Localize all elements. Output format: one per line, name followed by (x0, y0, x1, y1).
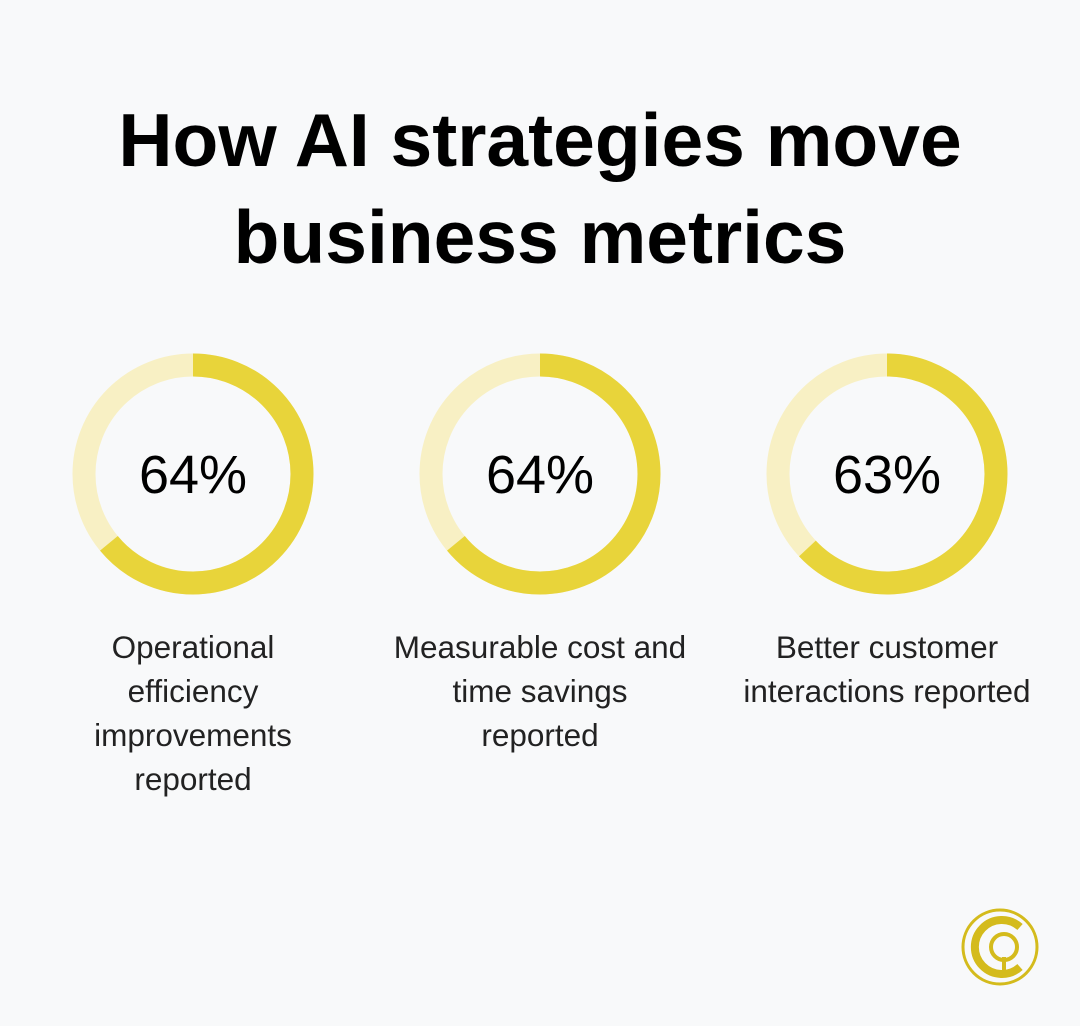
label 2: time savings (452, 673, 628, 709)
donut: 64% cost (420, 354, 660, 594)
label 1: reported (134, 761, 252, 797)
label 1: Operational (112, 629, 274, 665)
label 3: Better customer (776, 629, 998, 665)
donut: 64% operational: 64% (139, 445, 247, 505)
label 2 (394, 629, 686, 753)
donut: 64% operational (72, 354, 314, 594)
title (118, 98, 962, 279)
donut: 63% customer: 63% (833, 445, 941, 505)
label 2: reported (481, 717, 599, 753)
donut: 63% customer (766, 354, 1008, 594)
donut: 64% cost: 64% (486, 445, 594, 505)
label 1: efficiency (128, 673, 258, 709)
label 2: Measurable cost and (394, 629, 686, 665)
title: business metrics (234, 195, 846, 279)
icon: logo (962, 908, 1038, 986)
title: How AI strategies move (118, 98, 962, 182)
label 1 (94, 629, 292, 797)
label 3 (743, 629, 1031, 709)
label 1: improvements (94, 717, 292, 753)
label 3: interactions reported (743, 673, 1031, 709)
